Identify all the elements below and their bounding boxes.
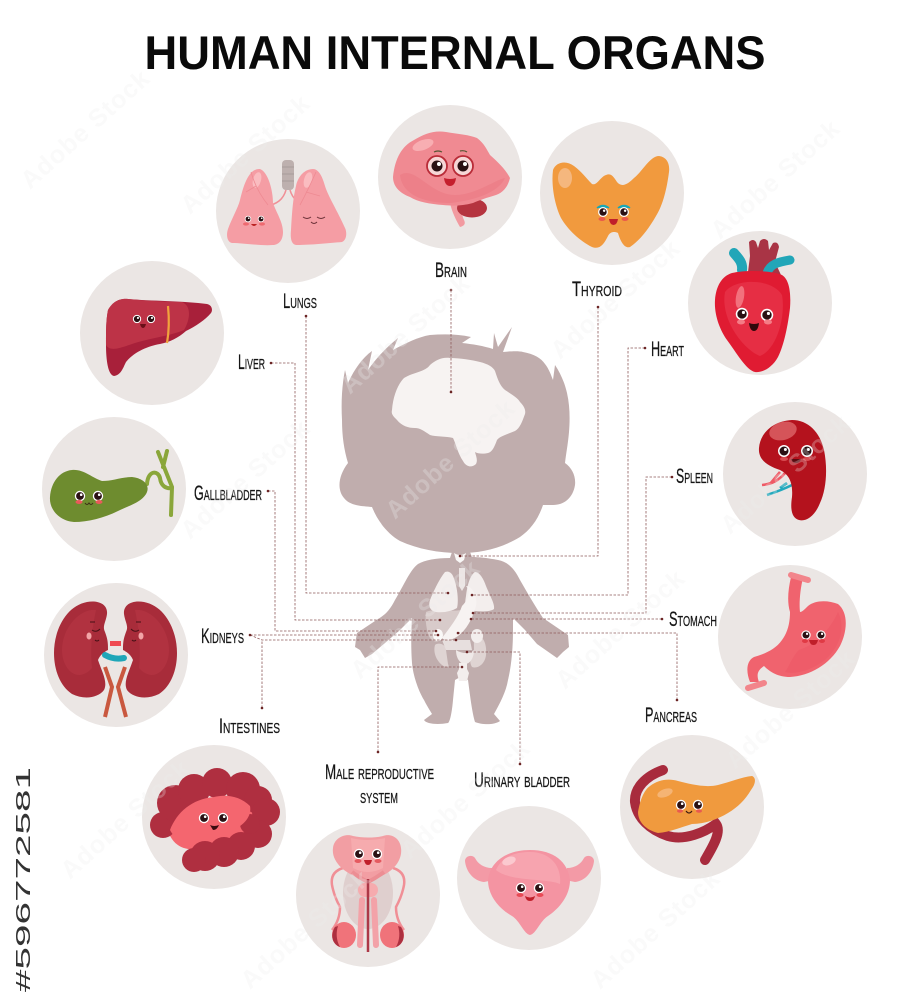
panel: thyroid — [540, 121, 684, 265]
watermark: Adobe Stock — [550, 564, 691, 694]
label: heart: Heart — [651, 338, 684, 361]
label: brain: Brain — [435, 259, 467, 282]
watermark: Adobe Stock — [335, 269, 476, 399]
watermark: Adobe Stock — [345, 554, 486, 684]
watermark: Adobe Stock — [175, 414, 316, 544]
label: male reproductive system — [325, 761, 434, 808]
panel: kidneys — [44, 583, 188, 727]
label: gallbladder: Gallbladder — [194, 482, 262, 505]
watermark: Adobe Stock — [380, 394, 521, 524]
watermark: Adobe Stock — [585, 864, 726, 994]
panel: stomach — [718, 565, 862, 709]
silhouette body — [355, 552, 569, 724]
watermark: Adobe Stock — [175, 89, 316, 219]
watermark: Adobe Stock — [715, 409, 856, 539]
leader lines — [250, 290, 677, 764]
leader line dots — [249, 289, 678, 765]
watermark: Adobe Stock — [720, 644, 861, 774]
watermark: Adobe Stock — [705, 114, 846, 244]
watermark: Adobe Stock — [545, 234, 686, 364]
silhouette brain — [392, 358, 525, 466]
panel: lungs — [216, 139, 360, 283]
label: male reproductive system: system — [360, 785, 398, 808]
label: male reproductive system: Male reproductive — [325, 761, 434, 784]
panel: pancreas — [620, 735, 764, 879]
title: HUMAN INTERNAL ORGANS — [144, 26, 766, 79]
silhouette head — [339, 327, 575, 553]
label: kidneys: Kidneys — [201, 625, 244, 648]
label: liver: Liver — [238, 351, 265, 374]
panel: liver — [80, 261, 224, 405]
panel: male reproductive system — [296, 823, 440, 967]
label: thyroid: Thyroid — [572, 278, 622, 301]
panel: brain — [378, 105, 522, 249]
label: stomach: Stomach — [669, 608, 717, 631]
panel: intestines — [142, 745, 286, 889]
watermark: Adobe Stock — [55, 754, 196, 884]
label: spleen: Spleen — [676, 465, 713, 488]
panel: spleen — [723, 402, 867, 546]
stock number side text: #596772581 — [13, 767, 35, 992]
panel: heart — [688, 231, 832, 375]
watermark: Adobe Stock — [15, 64, 156, 194]
panel: gallbladder — [42, 417, 186, 561]
watermark: Adobe Stock — [235, 864, 376, 994]
silhouette organs — [426, 553, 494, 681]
label: lungs: Lungs — [283, 290, 317, 313]
label: urinary bladder: Urinary bladder — [474, 769, 570, 792]
label: intestines: Intestines — [219, 715, 280, 738]
silhouette: child figure — [339, 327, 575, 724]
panel: urinary bladder — [457, 806, 601, 950]
watermark: Adobe Stock — [395, 734, 536, 864]
label: pancreas: Pancreas — [645, 704, 697, 727]
